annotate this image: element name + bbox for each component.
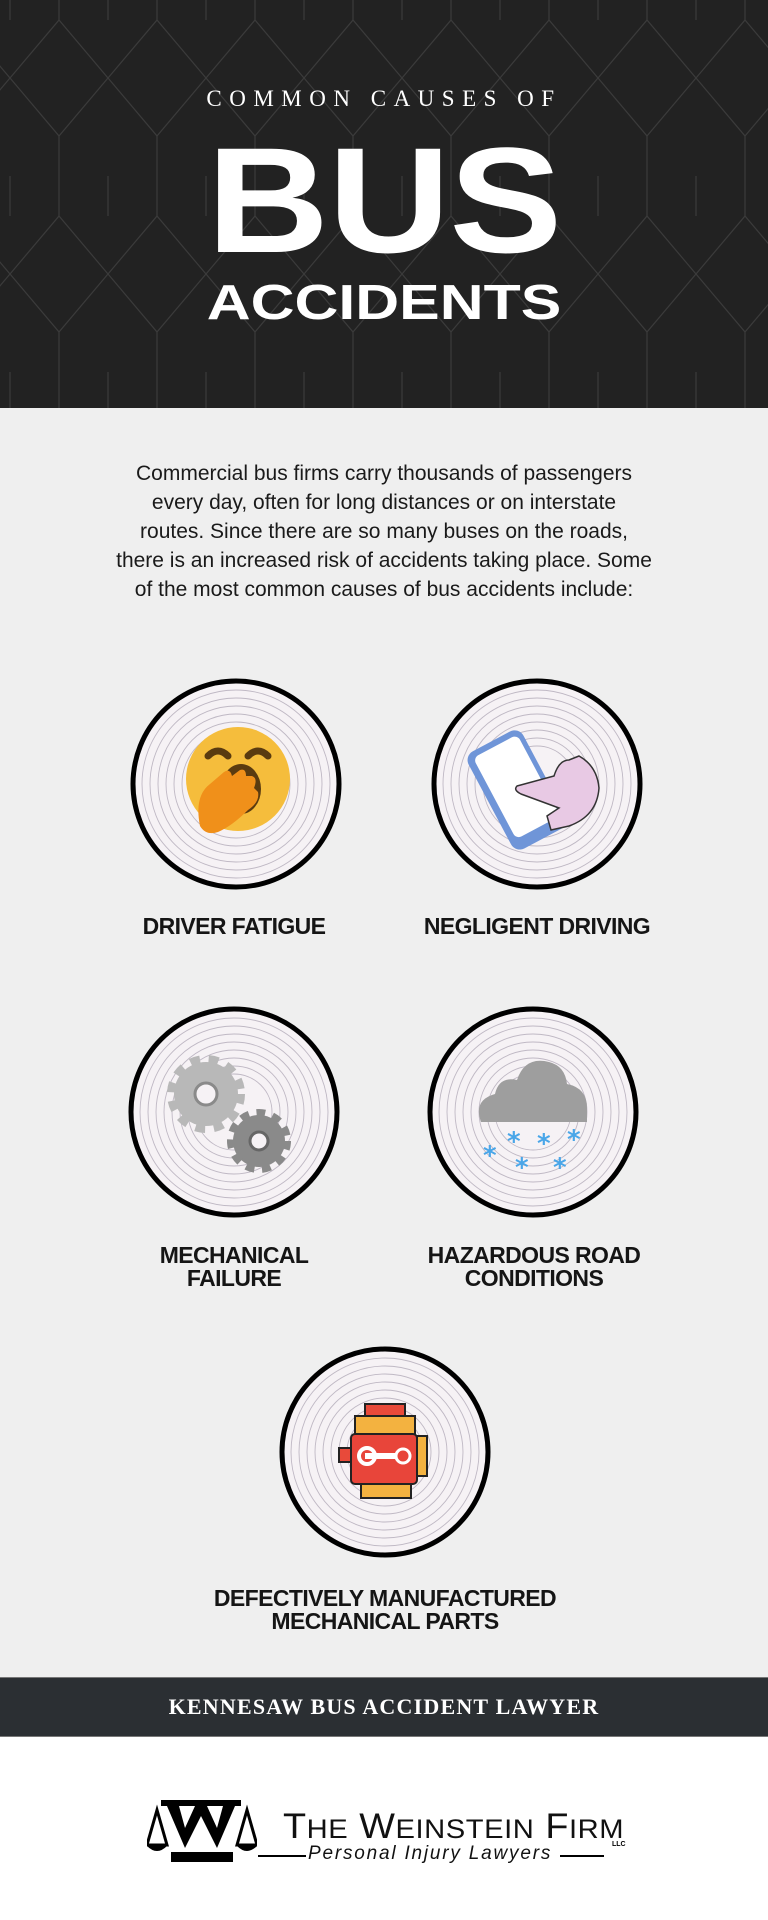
intro paragraph: there is an increased risk of accidents taking place. Some [116, 549, 652, 572]
label: hazardous road conditions: HAZARDOUS ROAD [428, 1242, 640, 1268]
label: hazardous road conditions [428, 1242, 640, 1291]
circle: hazardous road conditions icon [428, 1006, 638, 1218]
icon: scales W [147, 1800, 257, 1862]
label: defective parts [214, 1585, 556, 1634]
label: hazardous road conditions: CONDITIONS [465, 1265, 603, 1291]
tagline: Personal Injury Lawyers [308, 1843, 552, 1864]
intro paragraph: every day, often for long distances or on interstate [152, 491, 616, 514]
title: BUS: BUS [207, 116, 561, 284]
circle: hazardous road conditions icon: * [537, 1129, 551, 1159]
header panel [0, 0, 768, 408]
subtitle: common causes of: COMMON CAUSES OF [206, 86, 562, 111]
label: mechanical failure: MECHANICAL [160, 1242, 308, 1268]
circle: hazardous road conditions icon: * [553, 1153, 567, 1183]
label: mechanical failure [160, 1242, 308, 1291]
label: defective parts: DEFECTIVELY MANUFACTURED [214, 1585, 556, 1611]
intro paragraph [116, 462, 652, 601]
firm name: THE WEINSTEIN FIRM [283, 1807, 624, 1846]
circle: defective parts icon [280, 1346, 490, 1558]
circle: hazardous road conditions icon: * [567, 1125, 581, 1155]
intro paragraph: routes. Since there are so many buses on the roads, [140, 520, 628, 543]
circle: mechanical failure icon [128, 1006, 340, 1218]
logo: LLC [612, 1841, 626, 1848]
label: driver fatigue: DRIVER FATIGUE [143, 913, 325, 939]
logo [147, 1800, 626, 1864]
circle: hazardous road conditions icon: * [515, 1153, 529, 1183]
label: mechanical failure: FAILURE [187, 1265, 281, 1291]
label: defective parts: MECHANICAL PARTS [271, 1608, 499, 1634]
circle: driver fatigue icon [130, 678, 342, 890]
intro paragraph: Commercial bus firms carry thousands of passengers [136, 462, 632, 485]
title: ACCIDENTS: ACCIDENTS [207, 276, 561, 330]
label: negligent driving: NEGLIGENT DRIVING [424, 913, 650, 939]
light background panel [0, 408, 768, 1678]
circle: hazardous road conditions icon: * [507, 1127, 521, 1157]
intro paragraph: of the most common causes of bus accidents include: [135, 578, 633, 601]
circle: hazardous road conditions icon: * [483, 1141, 497, 1171]
footer banner: KENNESAW BUS ACCIDENT LAWYER [169, 1694, 599, 1719]
circle: negligent driving icon [432, 678, 642, 890]
footer banner [0, 1677, 768, 1737]
